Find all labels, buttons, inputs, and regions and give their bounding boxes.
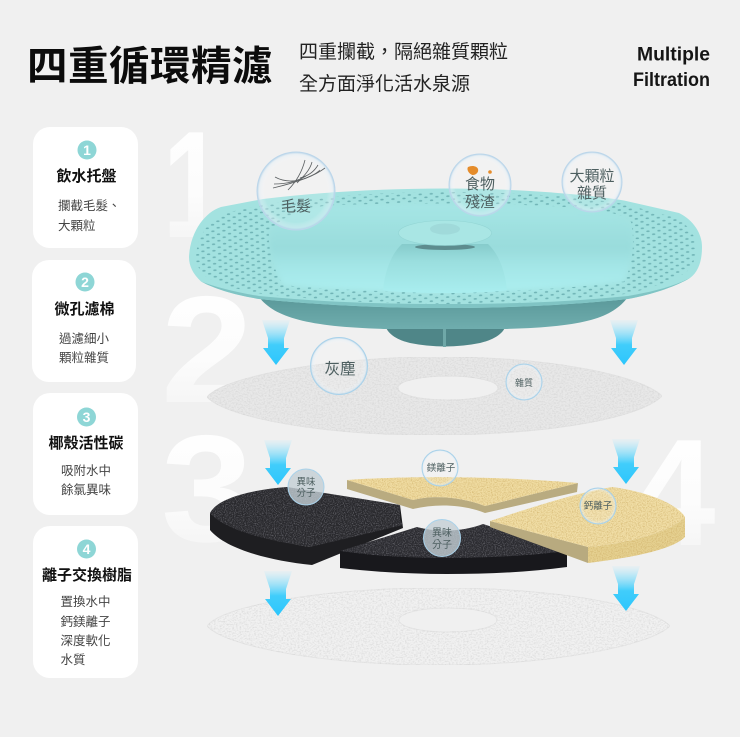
water tray xyxy=(189,188,702,347)
card 4: ion exchange resin: 深度軟化 xyxy=(60,633,111,648)
english title xyxy=(633,44,710,91)
card 3: coconut activated carbon: 椰殼活性碳 xyxy=(48,434,124,452)
card 3: coconut activated carbon xyxy=(33,393,138,515)
card 2: micro filter foam: 2 xyxy=(81,274,89,290)
ion resin block top xyxy=(347,477,578,513)
bubble: hair xyxy=(257,152,335,230)
card 3: coconut activated carbon: 餘氯異味 xyxy=(61,482,112,497)
tray centre cone xyxy=(383,244,507,293)
card 4: ion exchange resin: 離子交換樹脂 xyxy=(42,566,132,584)
resin right top face xyxy=(490,487,685,547)
bubble: food residue: 殘渣 xyxy=(465,194,495,211)
rim lower edge xyxy=(201,278,690,308)
card 4: ion exchange resin: 水質 xyxy=(60,652,86,667)
subtitle text: 全方面淨化活水泉源 xyxy=(299,73,470,95)
ion resin block right xyxy=(490,487,685,563)
bubble: calcium ions xyxy=(580,488,616,524)
flow arrows row 3 xyxy=(264,566,640,616)
subtitle text: 四重攔截，隔絕雜質顆粒 xyxy=(299,41,508,63)
bubble: dust xyxy=(310,338,368,394)
activated carbon block left xyxy=(210,487,403,565)
card 4: ion exchange resin: 鈣鎂離子 xyxy=(60,615,111,629)
bubble: magnesium ions xyxy=(422,450,458,486)
card 4: ion exchange resin xyxy=(33,526,138,678)
bubble: odor molecules left: 異味 xyxy=(296,476,316,488)
card 1: drinking tray xyxy=(33,127,138,248)
bubble: large particles: 大顆粒 xyxy=(569,168,615,185)
resin top side face xyxy=(347,480,578,513)
food crumbs xyxy=(467,166,478,175)
activated carbon block bottom xyxy=(340,524,567,574)
card 3: coconut activated carbon: 吸附水中 xyxy=(61,463,111,478)
bubble: odor molecules bottom xyxy=(424,520,460,556)
card 1: drinking tray: 飲水托盤 xyxy=(56,167,117,185)
bubble: odor molecules bottom: 分子 xyxy=(432,539,452,551)
resin top top face xyxy=(347,477,578,506)
tray foot rib xyxy=(443,329,446,347)
card 2: micro filter foam: 過濾細小 xyxy=(59,331,110,346)
card 1: drinking tray: 大顆粒 xyxy=(58,218,96,233)
tray rim xyxy=(189,188,702,308)
carbon bottom top face xyxy=(340,524,567,558)
cone shadow xyxy=(415,244,475,250)
flow arrows row 2 xyxy=(264,439,640,485)
card 2: micro filter foam: 顆粒雜質 xyxy=(59,350,109,365)
tray centre cap xyxy=(398,220,492,246)
filter foam layer 1 xyxy=(207,357,662,435)
card 2: micro filter foam xyxy=(32,260,136,382)
bubble: odor molecules left: 分子 xyxy=(296,488,316,499)
card 2: micro filter foam: 微孔濾棉 xyxy=(54,300,115,318)
subtitle text xyxy=(299,41,508,95)
title: 四重循環精濾 xyxy=(27,43,273,89)
bubble: food residue: 食物 xyxy=(465,176,495,193)
bubble: impurities xyxy=(506,364,542,400)
card 1: drinking tray: 1 xyxy=(83,142,91,158)
tray underside xyxy=(259,297,628,329)
background numeral 4: 4 xyxy=(631,408,716,578)
bubble: food residue xyxy=(449,154,511,216)
bubble: impurities: 雜質 xyxy=(515,377,533,388)
bubble: hair: 毛髮 xyxy=(281,198,311,215)
english title: Multiple xyxy=(637,44,710,66)
bubble: large particles: 雜質 xyxy=(577,184,607,202)
background numeral 2: 2 xyxy=(161,265,253,435)
cap hole xyxy=(430,224,460,234)
filter foam layer 2 xyxy=(207,588,670,665)
flow arrows row 1 xyxy=(262,320,638,365)
resin right side face xyxy=(588,517,685,563)
tray perforations xyxy=(196,192,696,304)
tray basin xyxy=(269,204,633,292)
bubble: magnesium ions: 鎂離子 xyxy=(427,462,456,474)
card 4: ion exchange resin: 置換水中 xyxy=(60,594,111,609)
card 3: coconut activated carbon: 3 xyxy=(83,409,91,425)
bubble: odor molecules bottom: 異味 xyxy=(432,527,452,539)
card 1: drinking tray: 攔截毛髮、 xyxy=(58,198,121,213)
carbon left top face xyxy=(210,487,403,547)
carbon bottom side face xyxy=(340,551,567,574)
bubble: odor molecules left xyxy=(288,469,324,505)
card 4: ion exchange resin: 4 xyxy=(83,541,91,557)
bubble: calcium ions: 鈣離子 xyxy=(584,500,613,512)
background numeral 3: 3 xyxy=(161,404,253,574)
resin right front face xyxy=(490,521,588,563)
tray foot xyxy=(385,325,506,346)
background numeral 1: 1 xyxy=(163,100,223,270)
bubble: dust: 灰塵 xyxy=(324,360,356,378)
carbon left side face xyxy=(210,505,403,565)
hair strands xyxy=(273,160,325,190)
english title: Filtration xyxy=(633,70,710,91)
bubble: large particles xyxy=(562,152,622,212)
